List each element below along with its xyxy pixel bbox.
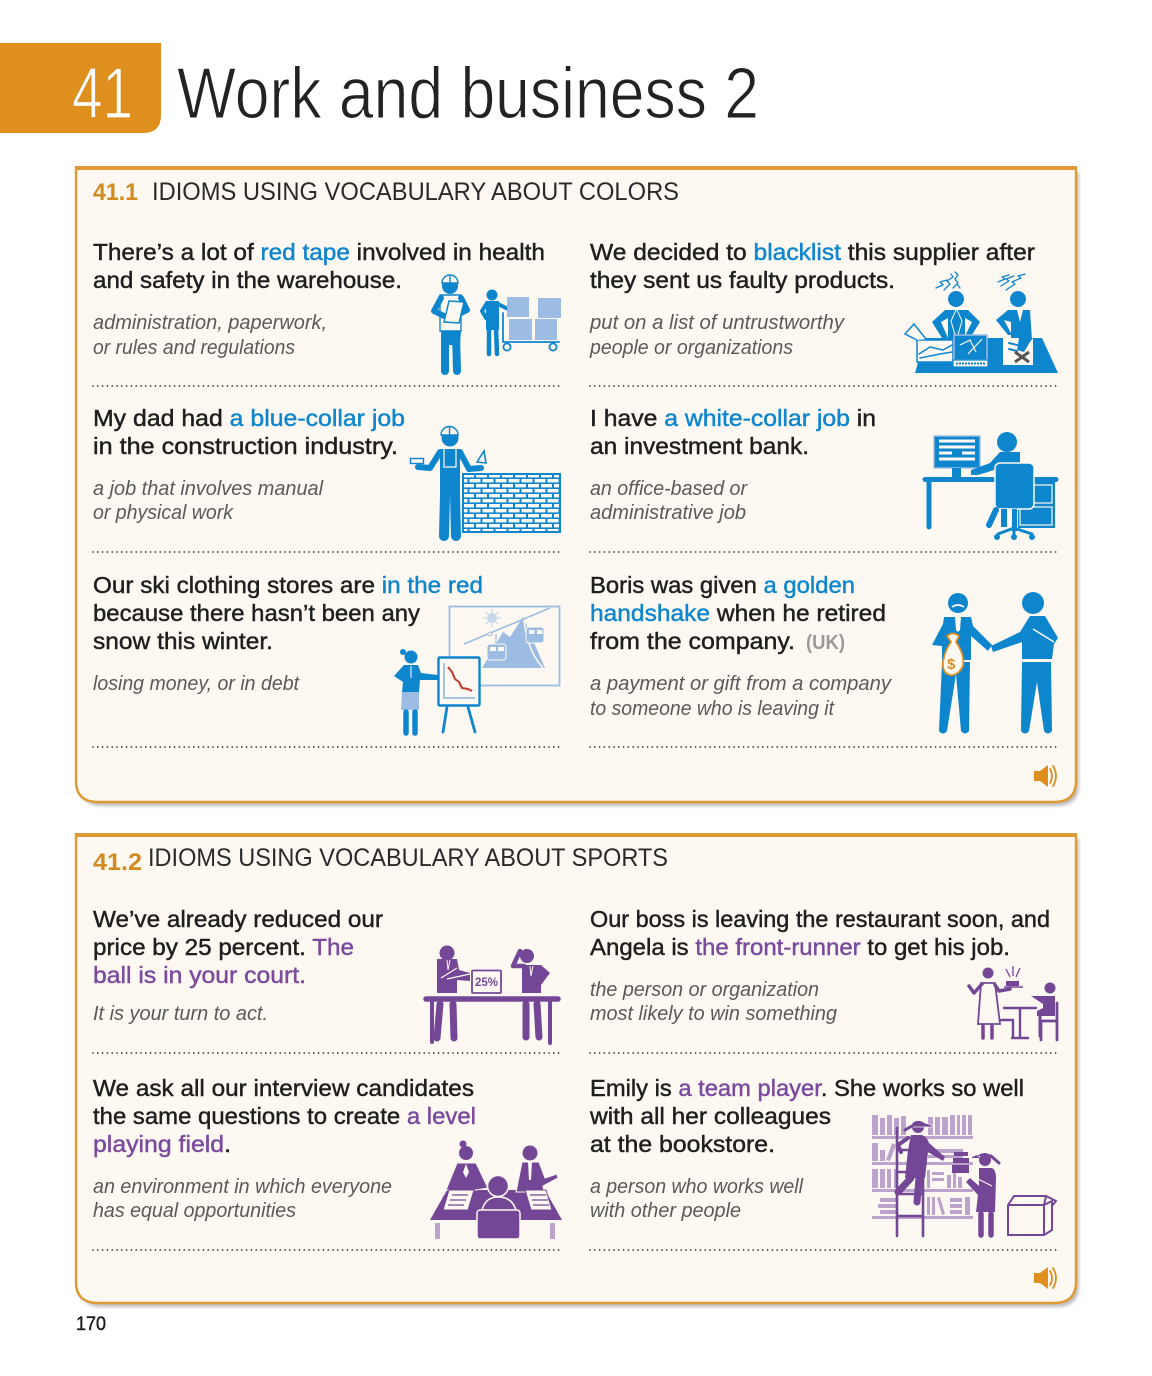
text block: golden handshake: from the company.: [590, 628, 795, 654]
icon: office worker at desk: [925, 432, 1056, 540]
text block: the ball is in your court: price by 25 percent. The: [93, 934, 354, 960]
text block: the front-runner: [590, 906, 1050, 1025]
text block: a team player: with other people: [590, 1200, 741, 1222]
text block: blue-collar job: in the construction industry.: [93, 433, 398, 459]
text block: white-collar job: [590, 405, 876, 524]
text block: the front-runner: most likely to win something: [590, 1003, 837, 1025]
text block: white-collar job: an office-based or: [590, 478, 748, 500]
text block: in the red: because there hasn’t been any: [93, 600, 420, 626]
text block: a team player: a person who works well: [590, 1176, 804, 1198]
text block: blacklist: put on a list of untrustworthy: [589, 312, 845, 334]
dotted divider: [590, 746, 1058, 748]
text block: blacklist: We decided to blacklist this supplier after: [590, 239, 1035, 265]
title: Work and business 2: [177, 54, 759, 134]
chapter number tab: [0, 43, 161, 134]
text block: a team player: [589, 1075, 1024, 1222]
text block: golden handshake: handshake when he retired: [590, 600, 886, 626]
text block: blue-collar job: a job that involves manual: [93, 478, 324, 500]
text block: blacklist: they sent us faulty products.: [590, 267, 895, 293]
icon: angry managers with faulty goods: [905, 272, 1058, 373]
text block: a team player: at the bookstore.: [590, 1131, 775, 1157]
dotted divider: [590, 1249, 1058, 1251]
dotted divider: [93, 385, 561, 387]
heading 41.1: 41.1: [93, 179, 138, 206]
text block: blacklist: [589, 239, 1035, 359]
text block: the front-runner: Angela is the front-runner to get his job.: [590, 934, 1010, 960]
icon: handshake and money bag: $: [947, 656, 956, 673]
icon: price negotiation at a table: [426, 946, 558, 1043]
icon: interview panel: [430, 1140, 562, 1239]
heading 41.1: IDIOMS USING VOCABULARY ABOUT COLORS: [152, 178, 679, 206]
icon: price negotiation at a table: 25%: [475, 977, 498, 989]
text block: a team player: with all her colleagues: [589, 1103, 831, 1129]
text block: white-collar job: I have a white-collar job in: [590, 405, 876, 431]
icon: warehouse workers with boxes: [434, 275, 561, 371]
text block: red tape: and safety in the warehouse.: [93, 267, 402, 293]
text block: the ball is in your court: It is your turn to act.: [93, 1003, 268, 1025]
panel: 41.1 idioms using vocabulary about colors: [75, 166, 1079, 806]
icon: waitress and diner: [969, 966, 1057, 1040]
dotted divider: [590, 551, 1058, 553]
heading 41.2: IDIOMS USING VOCABULARY ABOUT SPORTS: [148, 844, 668, 872]
icon: audio speaker: [1034, 1267, 1056, 1289]
text block: a level playing field: the same questions to create a level: [93, 1103, 476, 1129]
text block: red tape: administration, paperwork,: [93, 312, 327, 334]
icon: handshake and money bag: [932, 592, 1058, 734]
text block: white-collar job: an investment bank.: [590, 433, 809, 459]
icon: audio speaker: [1034, 765, 1056, 787]
text block: in the red: snow this winter.: [93, 628, 273, 654]
text block: golden handshake: Boris was given a golden: [590, 572, 855, 598]
text block: red tape: [93, 239, 545, 359]
text block: the ball is in your court: ball is in your court.: [93, 962, 306, 988]
text block: in the red: losing money, or in debt: [93, 673, 300, 695]
text block: a level playing field: playing field .: [93, 1131, 231, 1157]
text block: golden handshake: a payment or gift from a company: [590, 673, 892, 695]
dotted divider: [93, 1052, 561, 1054]
text block: golden handshake: to someone who is leaving it: [590, 698, 835, 720]
text block: white-collar job: administrative job: [590, 502, 746, 524]
text block: red tape: or rules and regulations: [93, 337, 295, 359]
dotted divider: [93, 746, 561, 748]
icon: presenter with falling chart and ski lift picture: [394, 606, 560, 733]
text block: a level playing field: [93, 1075, 476, 1222]
text block: blacklist: people or organizations: [589, 337, 793, 359]
dotted divider: [590, 385, 1058, 387]
text block: blue-collar job: or physical work: [93, 502, 234, 524]
text block: in the red: [93, 572, 483, 695]
text block: golden handshake: [590, 572, 892, 720]
icon: colleagues in a bookstore: [872, 1115, 1056, 1236]
dotted divider: [93, 551, 561, 553]
text block: a level playing field: an environment in which everyone: [93, 1176, 392, 1198]
dotted divider: [590, 1052, 1058, 1054]
text block: the front-runner: the person or organization: [590, 979, 819, 1001]
text block: a team player: Emily is a team player. She works so well: [590, 1075, 1024, 1101]
chapter number tab: 41: [72, 54, 133, 134]
text block: the ball is in your court: [93, 906, 383, 1025]
heading 41.2: 41.2: [93, 849, 142, 876]
icon: bricklayer and wall: [410, 426, 561, 536]
text block: red tape: There’s a lot of red tape involved in health: [93, 239, 545, 265]
text block: blue-collar job: My dad had a blue-collar job: [93, 405, 405, 431]
text block: the ball is in your court: We’ve already reduced our: [93, 906, 383, 932]
page number: 170: [76, 1314, 106, 1335]
text block: a level playing field: We ask all our interview candidates: [93, 1075, 474, 1101]
text block: in the red: Our ski clothing stores are in the red: [93, 572, 483, 598]
dotted divider: [93, 1249, 561, 1251]
text block: golden handshake: (UK): [806, 632, 845, 654]
text block: the front-runner: Our boss is leaving the restaurant soon, and: [590, 906, 1050, 932]
text block: blue-collar job: [93, 405, 405, 524]
text block: a level playing field: has equal opportunities: [93, 1200, 296, 1222]
panel: 41.2 idioms using vocabulary about sports: [75, 833, 1079, 1307]
